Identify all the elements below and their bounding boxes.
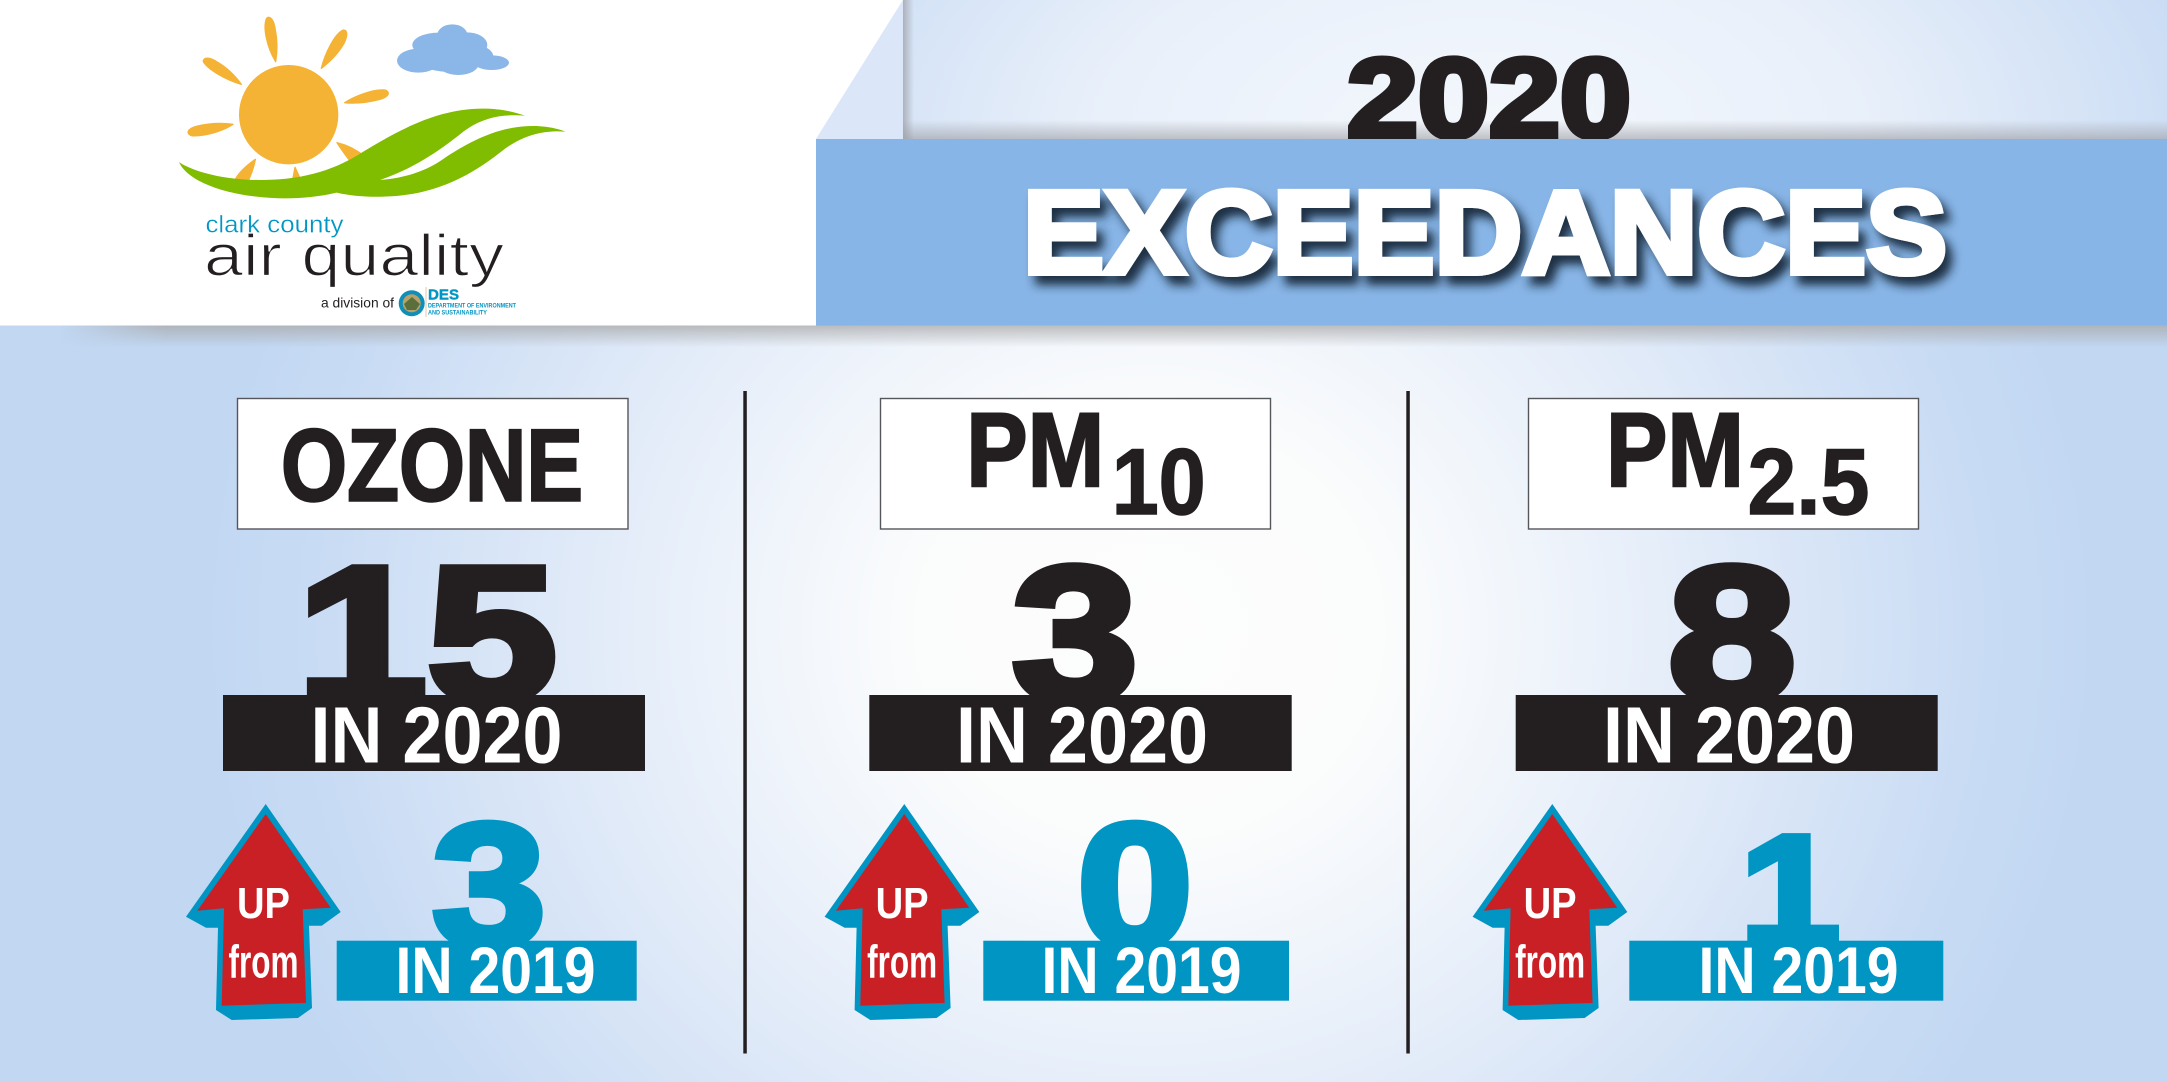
PM10 label box [880, 398, 1270, 529]
DES divider and wordmark [426, 286, 517, 317]
PM10 label [966, 392, 1206, 534]
ozone up arrow: UP [237, 879, 290, 928]
PM2.5 label: 2.5 [1748, 429, 1870, 534]
title banner [816, 139, 2167, 326]
banner fold [816, 0, 903, 139]
logo text: a division of: a division of [321, 294, 394, 310]
ozone up arrow [186, 804, 341, 1020]
panel: ozone [186, 398, 645, 1020]
PM10 up arrow: from [867, 936, 937, 988]
panel: PM10 [825, 392, 1292, 1020]
PM2.5 up arrow: UP [1524, 879, 1577, 928]
PM2.5 up arrow: from [1515, 936, 1585, 988]
PM2.5 2019 bar [1629, 941, 1943, 1001]
icon: sun [188, 17, 388, 181]
ozone 2019 bar text: IN 2019 [396, 933, 596, 1007]
white corner beside fold [816, 0, 903, 139]
PM10 2019 bar [983, 941, 1289, 1001]
column divider 1 [743, 391, 747, 1054]
main title: exceedances: EXCEEDANCES [1023, 167, 1947, 299]
PM2.5 2019 count: 1 [1740, 804, 1840, 978]
PM2.5 2020 count: 8 [1668, 526, 1796, 742]
ozone 2020 bar text: IN 2020 [310, 690, 562, 780]
ozone 2020 bar [223, 695, 645, 771]
PM10 up arrow: UP [876, 879, 929, 928]
ozone label box [238, 398, 628, 529]
PM10 label: PM [966, 392, 1104, 509]
PM2.5 label box [1528, 398, 1918, 529]
DES divider and wordmark: DES [428, 286, 459, 304]
ozone up arrow: from [228, 936, 298, 988]
main title year: 2020 [1347, 36, 1631, 161]
PM10 2020 bar text: IN 2020 [956, 690, 1208, 780]
ozone 2020 count: 15 [297, 526, 557, 742]
PM10 2019 count: 0 [1077, 788, 1193, 984]
ozone 2019 bar [337, 941, 637, 1001]
PM2.5 label: PM [1606, 392, 1744, 509]
panel: PM2.5 [1473, 392, 1943, 1020]
DES divider and wordmark: AND SUSTAINABILITY [428, 309, 487, 316]
logo panel [0, 0, 816, 326]
PM2.5 label [1606, 392, 1870, 534]
shadow below header [76, 326, 2167, 344]
PM2.5 2019 bar text: IN 2019 [1698, 933, 1898, 1007]
logo text: air quality: air quality [204, 224, 504, 288]
PM10 2019 bar text: IN 2019 [1042, 933, 1242, 1007]
icon: cloud [397, 24, 509, 75]
shadow beside fold [903, 0, 914, 139]
PM2.5 2020 bar text: IN 2020 [1603, 690, 1855, 780]
icon: green leaves [179, 109, 566, 198]
PM10 2020 bar [869, 695, 1292, 771]
DES divider and wordmark: DEPARTMENT OF ENVIRONMENT [428, 302, 517, 309]
PM10 label: 10 [1112, 429, 1206, 534]
PM2.5 2020 bar [1516, 695, 1938, 771]
shadow above banner [903, 120, 2167, 139]
PM10 up arrow [825, 804, 979, 1020]
PM10 2020 count: 3 [1012, 526, 1138, 742]
PM2.5 up arrow [1473, 804, 1627, 1020]
logo: sun, cloud and leaves [179, 17, 566, 198]
top right background band [903, 0, 2167, 139]
column divider 2 [1406, 391, 1410, 1054]
ozone 2019 count: 3 [432, 788, 546, 984]
ozone label: OZONE [281, 408, 583, 522]
icon: DES seal [399, 290, 425, 316]
logo text: clark county: clark county [206, 212, 344, 238]
